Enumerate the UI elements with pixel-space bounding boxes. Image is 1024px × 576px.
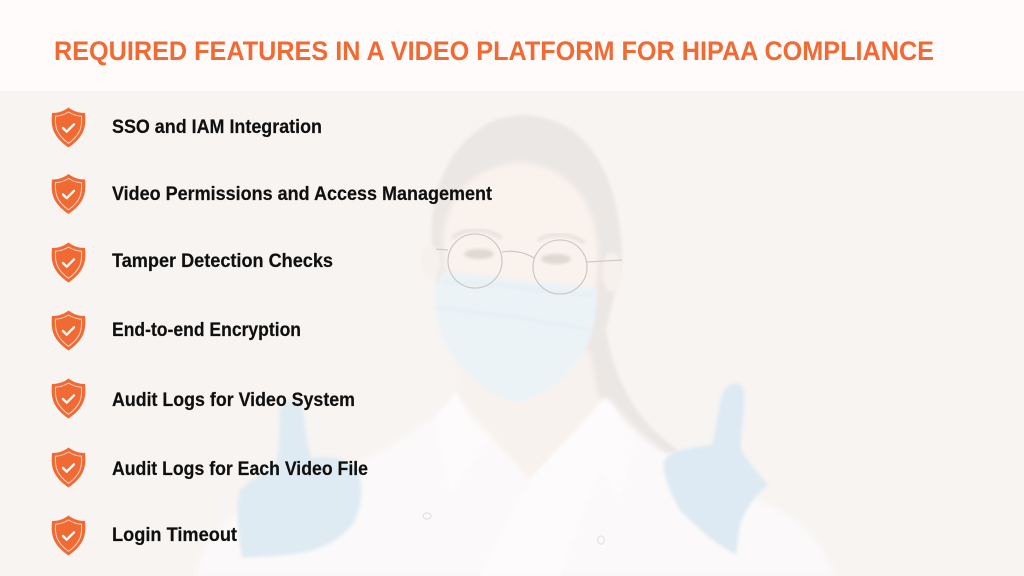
- feature 1: SSO and IAM Integration: [112, 116, 322, 138]
- neck: [455, 350, 600, 480]
- shirt collar: [434, 392, 635, 576]
- feature 7: [52, 516, 237, 556]
- collar buttons: [423, 513, 604, 544]
- lab coat: [195, 392, 835, 576]
- glasses: [436, 234, 622, 294]
- feature 5: Audit Logs for Video System: [112, 389, 355, 411]
- feature 4: [52, 310, 301, 350]
- feature 6: [52, 448, 368, 488]
- ears: [421, 245, 441, 279]
- feature 6: Audit Logs for Each Video File: [112, 458, 368, 480]
- feature 1: [52, 108, 322, 148]
- face mask: [435, 272, 597, 402]
- feature 2: Video Permissions and Access Management: [112, 183, 492, 205]
- left glove: [237, 400, 361, 558]
- hair and ponytail: [431, 115, 678, 454]
- header band: [0, 0, 1024, 91]
- feature 7: Login Timeout: [112, 524, 237, 546]
- feature 3: [52, 242, 333, 282]
- feature 4: End-to-end Encryption: [112, 319, 301, 341]
- title: REQUIRED FEATURES IN A VIDEO PLATFORM FOR HIPAA COMPLIANCE: [54, 36, 934, 66]
- feature 3: Tamper Detection Checks: [112, 250, 333, 272]
- right glove: [664, 383, 768, 554]
- face: [443, 162, 598, 365]
- eyes: [464, 249, 494, 259]
- eyebrows: [452, 230, 502, 238]
- illustration: doctor with mask giving thumbs up: [195, 115, 835, 576]
- feature 5: [52, 378, 355, 418]
- feature 2: [52, 174, 492, 214]
